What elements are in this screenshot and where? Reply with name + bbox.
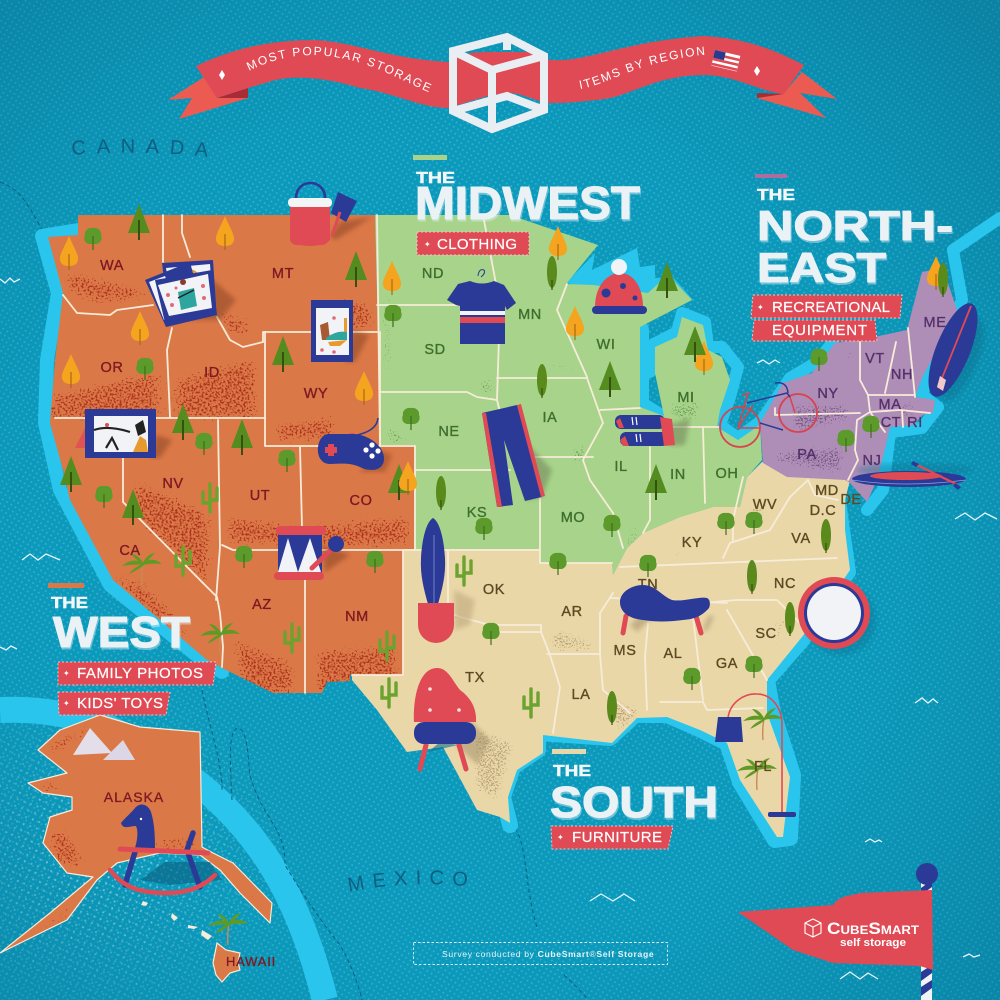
state labels: South: [465, 483, 862, 775]
logo cube: [805, 919, 821, 937]
flag pennant: [738, 890, 933, 970]
state labels: South: TN: [638, 577, 658, 593]
coastline glow: [42, 218, 1000, 840]
heading: The Northeast: THE: [757, 187, 795, 204]
icon: toy drum: [274, 526, 350, 580]
state labels: Midwest: SD: [424, 342, 446, 358]
tag: family photos and kids toys: KIDS' TOYS: [77, 695, 163, 712]
icon: beanie hat: [592, 259, 647, 314]
tag: family photos and kids toys: [58, 662, 216, 715]
light-blue current band: [0, 710, 325, 1000]
state labels: West: MT: [272, 266, 294, 282]
icon: arc floor lamp: [715, 694, 796, 817]
icon: mountains: [73, 728, 135, 760]
tag: recreational equipment: EQUIPMENT: [772, 322, 867, 339]
icon: framed photo Wyoming: [311, 300, 369, 362]
state labels: West: OR: [101, 360, 123, 376]
state labels: Midwest: MI: [677, 390, 695, 406]
state labels: Midwest: OH: [716, 466, 738, 482]
state labels: Midwest: MO: [561, 510, 585, 526]
icon: bicycle: [720, 383, 817, 447]
state labels: Midwest: IN: [670, 467, 686, 483]
icon: round mirror: [798, 577, 876, 655]
heading: The South: [550, 749, 718, 849]
state labels: West: AZ: [252, 597, 272, 613]
state labels: Midwest: MN: [518, 307, 542, 323]
state labels: Northeast: NJ: [863, 453, 881, 469]
heading: The South: SOUTH: [550, 778, 718, 827]
tag: family photos and kids toys: ✦: [63, 699, 70, 708]
heading: The Northeast: [751, 174, 953, 341]
icon: rocking horse: [110, 805, 222, 893]
heading: The South: THE: [553, 763, 591, 780]
banner text left: MOST POPULAR STORAGE: [246, 46, 432, 92]
icon: game controller: [318, 418, 392, 472]
tag: clothing: ✦: [424, 240, 431, 249]
tag: family photos and kids toys: FAMILY PHOTOS: [77, 665, 203, 682]
state labels: South: WV: [753, 497, 777, 513]
state labels: Northeast: MA: [879, 397, 901, 413]
state labels: Northeast: VT: [865, 351, 885, 367]
state labels: Northeast: NY: [817, 386, 839, 402]
icon: t-shirt: [447, 270, 516, 344]
state labels: West: UT: [250, 488, 270, 504]
tag: recreational equipment: ✦: [757, 303, 764, 312]
state labels: West: WA: [100, 258, 124, 274]
survey credit: Survey conducted by CubeSmart®Self Storage: [442, 949, 654, 959]
top banner: [168, 32, 837, 134]
state labels: Midwest: IA: [543, 410, 557, 426]
state labels: West: [100, 258, 372, 625]
logo subtext: self storage: [840, 937, 906, 949]
state labels: South: VA: [791, 531, 811, 547]
wave marks: [0, 278, 997, 979]
icon: Hawaii palm: [208, 913, 248, 945]
state labels: Midwest: NE: [438, 424, 460, 440]
state labels: South: OK: [483, 582, 505, 598]
heading: The Northeast: EAST: [757, 244, 886, 291]
state labels: Midwest: WI: [597, 337, 615, 353]
trees and plants: West: [60, 204, 417, 660]
map: Midwest region: [375, 215, 762, 575]
state labels: South: AL: [664, 646, 682, 662]
state labels: Northeast: CT: [881, 415, 901, 431]
state labels: Northeast: PA: [797, 447, 817, 463]
state labels: Midwest: [422, 266, 738, 526]
icon: kayak: [852, 461, 973, 490]
survey credit: [414, 942, 668, 964]
state labels: South: AR: [561, 604, 583, 620]
heading: The Midwest: THE: [416, 170, 455, 187]
tag: family photos and kids toys: ✦: [63, 669, 70, 678]
state labels: West: NV: [162, 476, 184, 492]
icon: potted plant: [418, 518, 475, 643]
state labels: South: SC: [755, 626, 777, 642]
label: Canada: CANADA: [72, 138, 208, 157]
state labels: South: NC: [774, 576, 796, 592]
state labels: Northeast: NH: [891, 367, 913, 383]
state labels: South: DE: [840, 492, 862, 508]
trees: Northeast: [810, 256, 948, 452]
tag: furniture: FURNITURE: [572, 829, 662, 846]
heading: The Midwest: [413, 155, 640, 255]
state labels: Midwest: IL: [614, 459, 628, 475]
icon: wireframe cube: [453, 37, 544, 129]
label: Mexico: MEXICO: [348, 870, 467, 892]
state labels: Midwest: KS: [467, 505, 487, 521]
state labels: South: TX: [465, 670, 485, 686]
Hawaii: [141, 901, 276, 982]
icon: surfboard: [919, 297, 993, 406]
state labels: Northeast: [797, 315, 946, 469]
map: South region: [352, 462, 850, 837]
logo text: CubeSmart: [827, 919, 920, 938]
state labels: Northeast: ME: [924, 315, 946, 331]
icon: family photos stack: [145, 260, 236, 327]
icon: wedding photo: [75, 409, 172, 458]
Alaska: [0, 712, 272, 955]
label: Hawaii: HAWAII: [226, 954, 276, 969]
state labels: West: CA: [119, 543, 141, 559]
state labels: West: WY: [304, 386, 328, 402]
tag: furniture: ✦: [557, 833, 564, 842]
icon: bench: [620, 585, 714, 633]
banner tails: [168, 72, 837, 119]
banner ribbon: [196, 36, 804, 108]
state labels: South: MD: [815, 483, 839, 499]
map: West region: [40, 215, 415, 700]
icon: trousers: [482, 404, 552, 507]
label: Alaska: ALASKA: [104, 789, 164, 805]
state labels: South: GA: [716, 656, 738, 672]
heading: The Midwest: MIDWEST: [415, 177, 640, 229]
state labels: South: D.C: [810, 503, 836, 519]
heading: The West: WEST: [53, 608, 190, 657]
tag: recreational equipment: [751, 295, 902, 341]
banner ornaments: [219, 66, 760, 80]
tag: clothing: [417, 232, 529, 255]
flag with CubeSmart logo: [738, 863, 938, 1000]
map: Northeast region: [760, 268, 958, 505]
state labels: West: ID: [204, 365, 220, 381]
icon: pail and shovel: [288, 183, 372, 246]
state labels: West: NM: [345, 609, 369, 625]
heading: The West: [48, 583, 216, 715]
icon: armchair: [414, 668, 490, 769]
trees and plants: South: [382, 512, 831, 790]
state labels: Northeast: RI: [907, 415, 923, 431]
heading: The Northeast: NORTH-: [757, 202, 953, 249]
state labels: South: LA: [572, 687, 590, 703]
icon: US flag: [711, 50, 740, 71]
state labels: Midwest: ND: [422, 266, 444, 282]
state labels: South: MS: [614, 643, 636, 659]
state labels: South: FL: [754, 759, 772, 775]
tag: clothing: CLOTHING: [437, 236, 517, 253]
state borders: [55, 215, 930, 733]
tag: furniture: [551, 826, 673, 849]
tag: recreational equipment: RECREATIONAL: [772, 299, 890, 316]
heading: The West: THE: [51, 595, 88, 612]
flag pole: [916, 863, 938, 1000]
icon: sneakers: [615, 415, 690, 446]
trees and plants: Midwest: [383, 226, 713, 540]
state labels: South: KY: [682, 535, 702, 551]
banner text right: ITEMS BY REGION: [580, 46, 704, 89]
state labels: West: CO: [350, 493, 372, 509]
